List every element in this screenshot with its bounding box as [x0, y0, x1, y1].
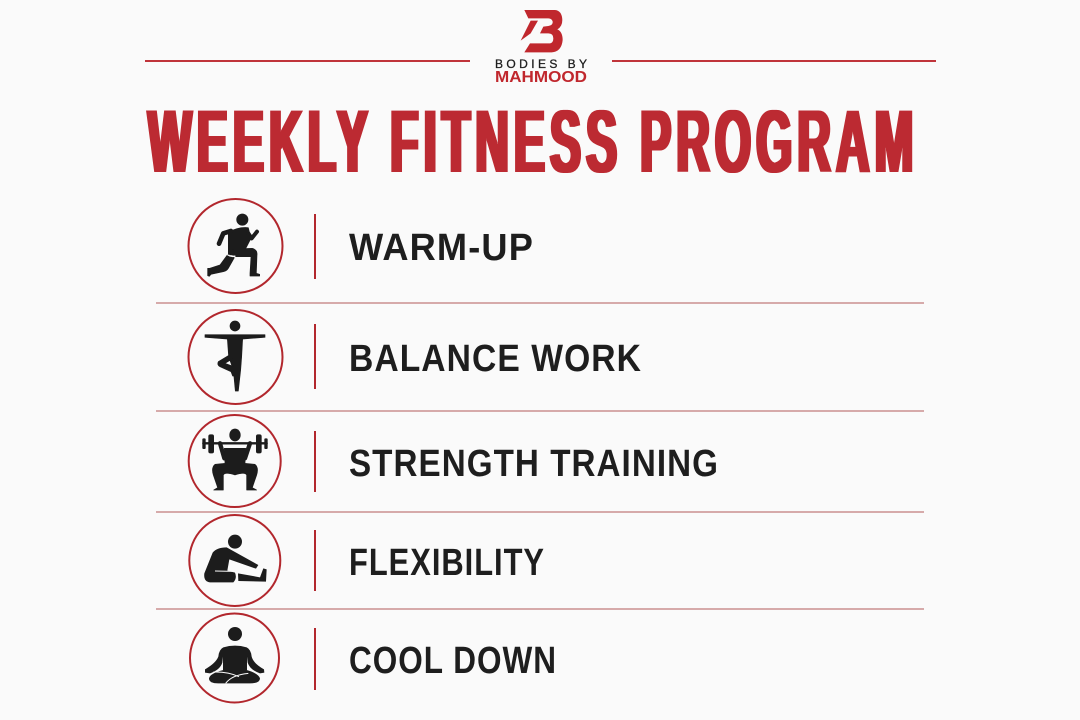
row: cool down	[190, 614, 557, 702]
label: balance work: BALANCE WORK	[349, 338, 642, 380]
label: warm-up: WARM-UP	[349, 227, 534, 269]
row: strength training	[189, 415, 719, 507]
label: strength training: STRENGTH TRAINING	[349, 443, 719, 485]
icon: B logo mark	[521, 10, 563, 52]
icon: seated stretch	[189, 515, 280, 606]
title: WEEKLY FITNESS PROGRAM	[148, 93, 918, 192]
row: warm-up	[188, 199, 534, 293]
label: flexibility: FLEXIBILITY	[349, 542, 545, 584]
logo text: Mahmood: MAHMOOD	[495, 69, 587, 86]
logo text: Bodies by: BODIES BY	[495, 57, 587, 71]
icon: barbell squat	[189, 415, 281, 507]
icon: meditation	[190, 614, 279, 702]
icon: balance pose	[188, 310, 282, 404]
label: cool down: COOL DOWN	[349, 640, 557, 682]
row: flexibility	[189, 515, 545, 606]
icon: runner	[188, 199, 282, 293]
logo: Bodies by Mahmood	[495, 10, 587, 86]
row: balance work	[188, 310, 642, 404]
